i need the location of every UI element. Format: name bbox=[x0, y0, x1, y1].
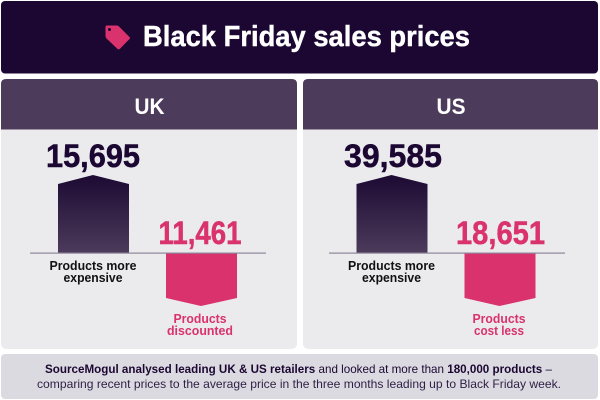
UK panel header bbox=[1, 79, 297, 130]
panel: US bbox=[303, 79, 598, 349]
title: Black Friday sales prices bbox=[143, 21, 470, 53]
US baseline bbox=[329, 252, 565, 254]
UK panel header: UK bbox=[134, 94, 165, 119]
US down arrow bar bbox=[464, 253, 536, 306]
footer line 2: comparing recent prices to the average price in the three months leading up to Black Friday week. bbox=[37, 377, 561, 391]
UK down arrow bar bbox=[166, 253, 237, 306]
US panel header: US bbox=[436, 94, 466, 119]
UK label: products more expensive: Products more bbox=[50, 258, 136, 273]
UK up arrow bar bbox=[58, 175, 129, 253]
UK value: products more expensive: 15,695 bbox=[46, 138, 140, 174]
panel: UK bbox=[1, 79, 297, 349]
US label: products cost less: Products bbox=[472, 311, 526, 326]
US label: products more expensive: Products more bbox=[348, 258, 435, 273]
footer note bbox=[1, 354, 598, 399]
US up arrow bar bbox=[356, 175, 428, 253]
US label: products more expensive: expensive bbox=[362, 270, 421, 285]
US value: products more expensive: 39,585 bbox=[344, 138, 442, 174]
title banner bbox=[1, 1, 598, 74]
UK label: products discounted: Products bbox=[174, 311, 226, 326]
US label: products cost less: cost less bbox=[474, 323, 524, 338]
UK label: products discounted: discounted bbox=[167, 323, 233, 338]
UK label: products more expensive: expensive bbox=[64, 270, 122, 285]
footer line 1: SourceMogul analysed leading UK & US retailers and looked at more than 180,000 products – bbox=[45, 362, 552, 376]
UK baseline bbox=[30, 252, 266, 254]
icon: price tag bbox=[106, 26, 130, 49]
US value: products cost less: 18,651 bbox=[456, 215, 545, 251]
UK value: products discounted: 11,461 bbox=[158, 215, 242, 251]
US panel header bbox=[303, 79, 598, 130]
